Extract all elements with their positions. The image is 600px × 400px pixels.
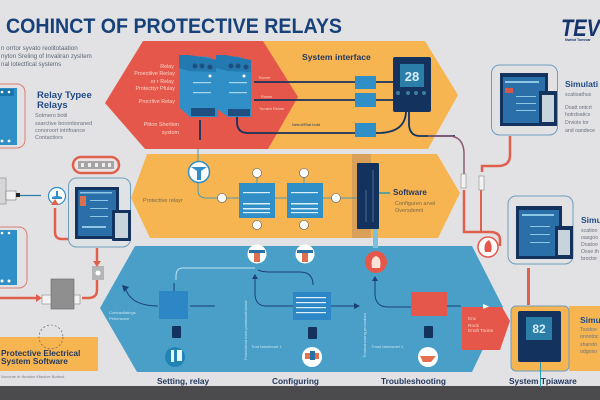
- red wire labels: Rorver: [259, 76, 271, 80]
- software heading: [393, 188, 435, 214]
- blue panel labels: Tmod bstorsmet 1: [371, 344, 404, 349]
- interface device: 28: [405, 69, 419, 84]
- setting block: [159, 291, 188, 319]
- relay block 1: [239, 183, 275, 218]
- wiring upper: [200, 82, 455, 140]
- red wire labels: [259, 76, 284, 111]
- intro text: nal lotectfical systems: [1, 61, 61, 68]
- bottom labels: Configuring: [272, 376, 319, 386]
- relay modules: [179, 55, 251, 117]
- bottom labels: Setting, relay: [157, 376, 209, 386]
- simulation panel top: scatioathus: [565, 92, 592, 98]
- relay type panel: Sotmero botil: [35, 113, 67, 119]
- logo: Nwtiot Tonvvar: [565, 38, 591, 42]
- tag text: Enc: [468, 316, 477, 322]
- footnote: Novonte dr ftrotstor Kfactive Bottrsd: [1, 374, 64, 379]
- panel: configuration blue chevron: [100, 246, 503, 372]
- relay block 2: [287, 183, 323, 218]
- intro text: nyton Sreling of Invaliran zysitem: [1, 53, 92, 60]
- bottom labels: Troubleshooting: [381, 376, 446, 386]
- red bell icon: [478, 237, 498, 257]
- white arrowhead: [483, 304, 489, 309]
- protective electrical software box: [0, 325, 98, 371]
- simulation panel middle: [508, 196, 600, 264]
- blue panel labels: Petomance: [109, 316, 130, 321]
- red panel labels: Proectilve Rerlay: [134, 71, 175, 77]
- system software device: odgoso: [580, 349, 597, 355]
- relay type panel: conoroort intrifoance: [35, 128, 85, 134]
- system software device: Tosdoo: [580, 327, 597, 333]
- pill indicator: [73, 157, 119, 173]
- relay type panel: Contactiors: [35, 135, 63, 141]
- blue panel labels: Trod batorbood 1: [251, 344, 282, 349]
- red panel labels: systom: [162, 130, 180, 136]
- system software device: onnotoc: [580, 334, 599, 340]
- title: COHINCT OF PROTECTIVE RELAYS: [6, 15, 342, 38]
- tag text: [468, 316, 494, 334]
- intro text: [1, 45, 92, 68]
- simulation panel middle: oasgoo: [581, 235, 598, 241]
- software heading: Oversdemit: [395, 208, 424, 214]
- interface device: [393, 57, 431, 112]
- red panel labels: [134, 64, 180, 136]
- node: person icon: [188, 162, 210, 182]
- red connector to system: [527, 268, 530, 305]
- red panel labels: Pitton Shertion: [144, 122, 179, 128]
- red wire labels: Rorver: [261, 95, 273, 99]
- simulation panel middle: broctor: [581, 256, 597, 262]
- relay type panel: ssarctive borontioraned: [35, 121, 92, 127]
- simulation panel top: and oandece: [565, 128, 595, 134]
- software column: [352, 154, 390, 246]
- bottom labels: [157, 376, 577, 386]
- red panel labels: Protecttyr Pfulay: [135, 86, 175, 92]
- simulation panel top: Doatt ontcrt: [565, 105, 592, 111]
- panel: troubleshooting red tag: [462, 307, 510, 350]
- red wire labels: Turrach Relure: [259, 107, 284, 111]
- bottom round icons: [165, 347, 438, 367]
- small relay label: Netrof/Rlat brdd: [292, 122, 320, 127]
- simulation panel top: Simulati: [565, 79, 598, 89]
- vertical notes: Troutoshoorng procedura: [362, 312, 367, 358]
- blue panel labels: [109, 310, 404, 349]
- tag text: Rock: [468, 323, 480, 329]
- system software device: sharsto: [580, 342, 597, 348]
- relay type panel: Relay Typee: [37, 90, 92, 101]
- simulation panel top: hotrdoatics: [565, 112, 591, 118]
- intro text: n orrtor syvato reolitotaation: [1, 45, 78, 52]
- red alert node: [365, 238, 387, 273]
- panel: protective relay red hexagon: [105, 41, 298, 149]
- vertical notes: [243, 301, 367, 360]
- left simulator device: [68, 178, 131, 247]
- blue panel arrowheads: [122, 274, 378, 309]
- blue panel labels: Contractlatings: [109, 310, 136, 315]
- mid wiring: [198, 149, 357, 198]
- configuring block: [293, 292, 331, 320]
- protective electrical software box: System Software: [1, 356, 68, 366]
- software heading: Configuren arvel: [395, 201, 435, 207]
- yellow panel label: Protective relayr: [143, 198, 183, 204]
- tag text: Enolt Toons: [468, 328, 494, 334]
- bottom labels: System Tpiaware: [509, 376, 577, 386]
- system interface heading: System interface: [302, 52, 371, 62]
- interface blocks: [355, 76, 376, 137]
- orange arrowheads: [36, 199, 101, 302]
- terminal connectors: [461, 174, 484, 190]
- gauge node: [48, 188, 66, 204]
- system software device: [511, 306, 600, 387]
- troubleshooting block: [411, 292, 447, 316]
- vertical notes: Protectinod troot pontarsorbaiond: [243, 301, 248, 360]
- simulation panel middle: Doatoo: [581, 242, 598, 248]
- simulation panel middle: scatioo: [581, 228, 598, 234]
- left relay module: [0, 227, 27, 288]
- panel: protective relay yellow chevron: [131, 154, 460, 238]
- device icons: [172, 326, 433, 339]
- left machinery: [0, 178, 41, 204]
- red panel labels: or r Relay: [151, 79, 174, 85]
- protective electrical software box: Protective Electrical: [1, 348, 80, 358]
- right red wiring: [428, 136, 510, 246]
- relay type panel: Relays: [37, 100, 68, 111]
- simulation panel top: Drviots tor: [565, 120, 589, 126]
- teardrop icons row: [248, 244, 314, 264]
- gray coupler: [42, 266, 104, 309]
- simulation panel top: [492, 65, 598, 135]
- software heading: Software: [393, 188, 427, 197]
- system software device: 82: [532, 322, 546, 336]
- relay type panel: [0, 84, 92, 148]
- left red wiring: [0, 208, 97, 298]
- panel: system interface chevron: [263, 41, 458, 149]
- red panel labels: Procrlive Relay: [139, 99, 175, 105]
- simulation panel middle: Osse th: [581, 249, 599, 255]
- small node circles: [218, 168, 340, 230]
- blue panel wiring: [125, 268, 461, 307]
- red panel labels: Relay: [160, 64, 174, 70]
